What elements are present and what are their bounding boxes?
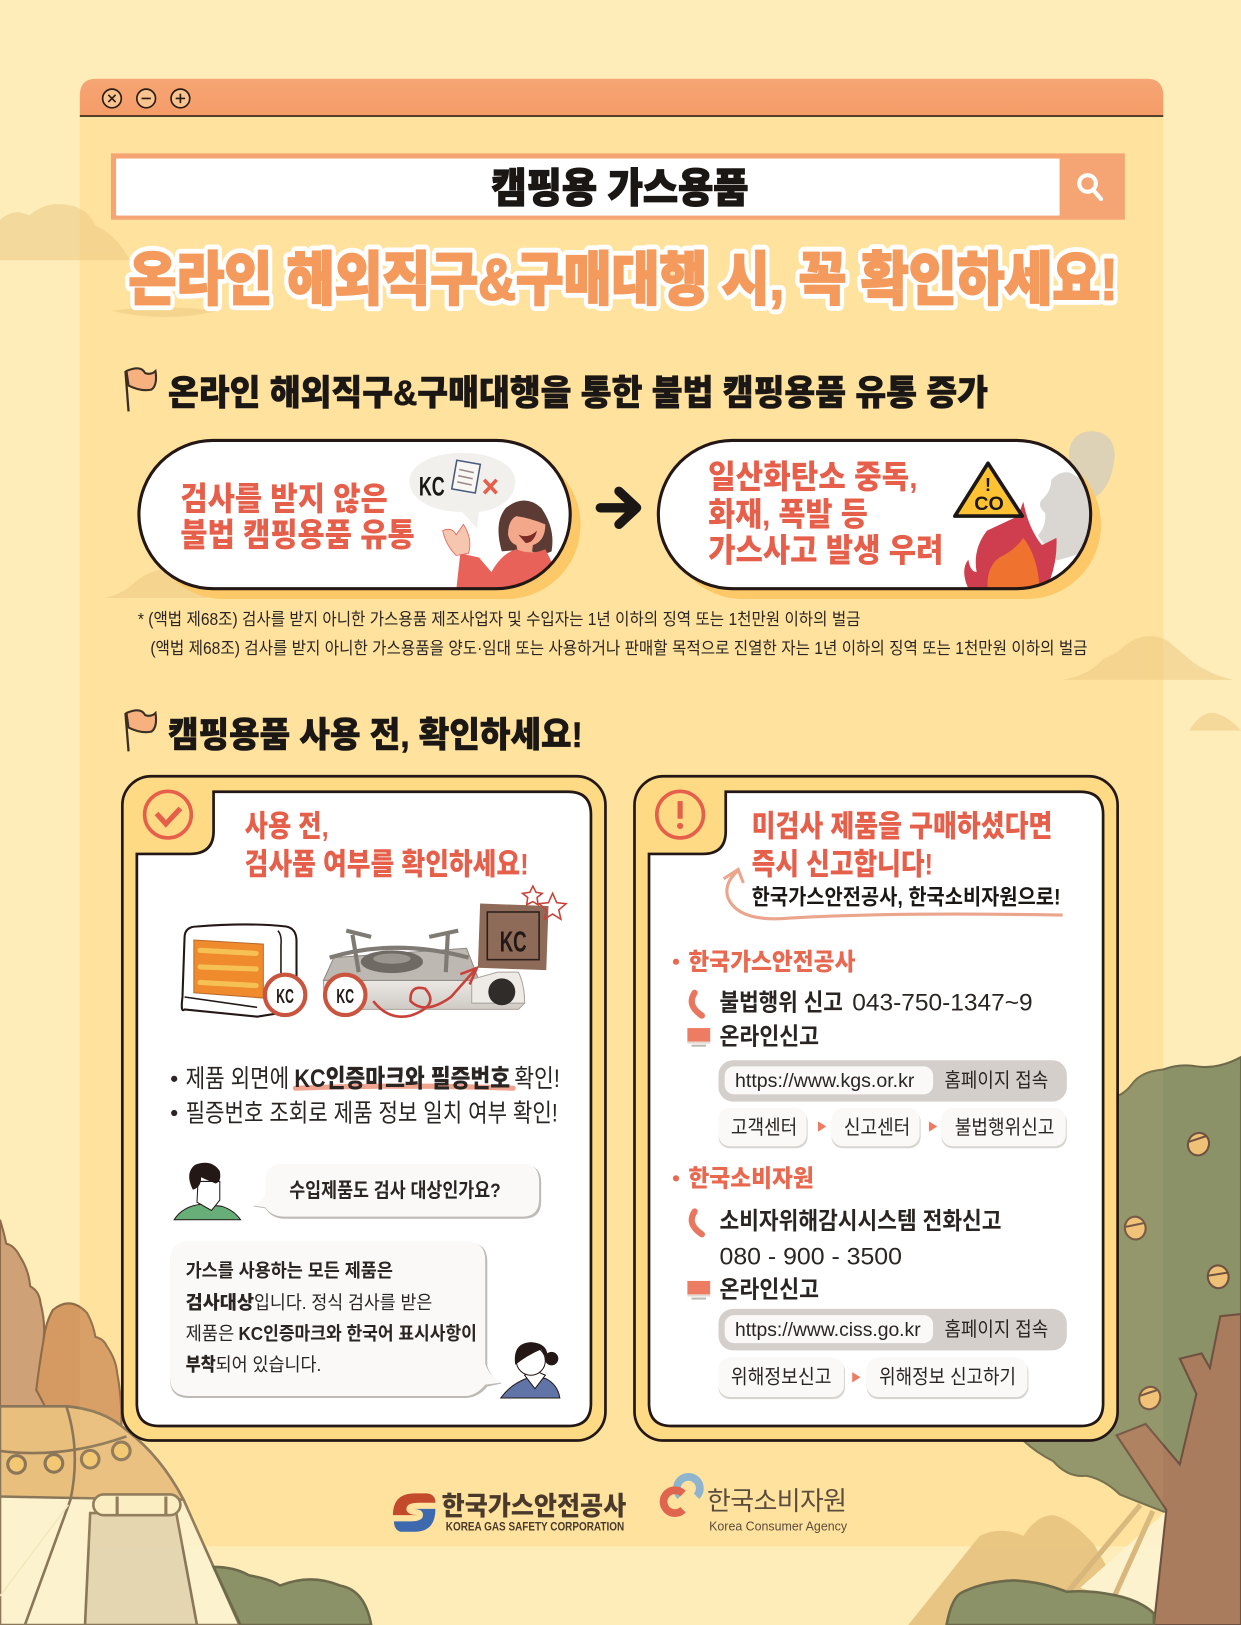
fire and smoke illustration bbox=[964, 472, 1095, 593]
panel: illegal goods pill bbox=[139, 440, 581, 599]
footnotes: (액법 제68조) 검사를 받지 아니한 가스용품을 양도·임대 또는 사용하거나 판매할 목적으로 진열한 자는 1년 이하의 징역 또는 1천만원 이하의 벌금 bbox=[150, 639, 1088, 658]
icon: phone bbox=[692, 993, 702, 1016]
icon: monitor bbox=[687, 1281, 710, 1300]
logo: Korea Gas Safety Corporation bbox=[393, 1492, 626, 1534]
icon: CO warning triangle: ! bbox=[985, 474, 991, 495]
icon: magnifier bbox=[1079, 175, 1101, 199]
icon: man bbox=[174, 1163, 241, 1220]
KGS phone number bbox=[720, 989, 1033, 1016]
acorns bbox=[1123, 1129, 1230, 1413]
footnotes bbox=[138, 610, 1088, 658]
icon: KC speech bubble bbox=[410, 453, 515, 529]
icon: CO warning triangle bbox=[955, 463, 1022, 516]
panel heading bbox=[752, 810, 1052, 882]
logo: Korea Gas Safety Corporation: KOREA GAS SAFETY CORPORATION bbox=[446, 1520, 624, 1534]
checklist: KC인증마크와 필증번호 bbox=[294, 1065, 510, 1093]
footnotes: * (액법 제68조) 검사를 받지 아니한 가스용품 제조사업자 및 수입자는 1년 이하의 징역 또는 1천만원 이하의 벌금 bbox=[138, 610, 861, 629]
speech bubble: answer: 제품은 bbox=[186, 1323, 234, 1344]
pill text: 일산화탄소 중독, bbox=[708, 459, 918, 495]
panel: report bbox=[634, 776, 1118, 1441]
speech bubble: answer: 되어 있습니다. bbox=[216, 1354, 321, 1375]
background illustration: trees, tent and bushes bbox=[0, 1057, 1241, 1625]
woman illustration bbox=[443, 501, 560, 591]
right tree trunk bbox=[1117, 1314, 1241, 1625]
KCA phone number: 080 - 900 - 3500 bbox=[720, 1243, 902, 1270]
background clouds bbox=[0, 204, 1241, 731]
speech bubble: answer bbox=[170, 1242, 502, 1398]
sub heading with arrow: 한국가스안전공사, 한국소비자원으로! bbox=[752, 885, 1061, 910]
KGS online label: 온라인신고 bbox=[720, 1024, 819, 1051]
checklist bbox=[171, 1065, 560, 1127]
KCA path buttons: 위해정보 신고하기 bbox=[879, 1367, 1016, 1389]
icon: heater bbox=[182, 924, 305, 1017]
KCA phone number bbox=[720, 1208, 1002, 1270]
section heading 2: 캠핑용품 사용 전, 확인하세요! bbox=[168, 716, 583, 755]
KGS phone number: 불법행위 신고 bbox=[720, 989, 843, 1016]
search bar title: 캠핑용 가스용품 bbox=[491, 165, 749, 211]
panel heading: 즉시 신고합니다! bbox=[752, 849, 933, 882]
right bush bbox=[947, 1580, 1154, 1625]
section: KGS bbox=[673, 949, 1067, 1148]
emblem bbox=[664, 1477, 700, 1513]
KGS path buttons bbox=[718, 1108, 1067, 1148]
icon: KC certificate label: KC bbox=[500, 926, 527, 958]
speech bubble: answer: 입니다. 정식 검사를 받은 bbox=[254, 1292, 432, 1313]
icon: gas stove: KC bbox=[336, 985, 354, 1008]
KCA online label: 온라인신고 bbox=[720, 1277, 819, 1304]
left tent bbox=[0, 1406, 239, 1625]
smoke blob behind pill bbox=[1069, 431, 1115, 500]
left back tree bbox=[0, 1220, 47, 1409]
icon: KC certificate label bbox=[478, 886, 566, 970]
KCA path buttons bbox=[718, 1358, 1028, 1399]
KCA url bar: 홈페이지 접속 bbox=[944, 1319, 1048, 1341]
KCA url bar: https://www.ciss.go.kr bbox=[735, 1319, 921, 1341]
pill text: 검사를 받지 않은 bbox=[180, 481, 388, 517]
KCA url bar bbox=[718, 1309, 1067, 1350]
right tent bbox=[1080, 1511, 1166, 1613]
speech bubble: question: 수입제품도 검사 대상인가요? bbox=[289, 1180, 501, 1202]
speech bubble: answer: KC인증마크와 한국어 표시사항이 bbox=[238, 1323, 477, 1344]
section heading 1: 온라인 해외직구&구매대행을 통한 불법 캠핑용품 유통 증가 bbox=[168, 374, 988, 413]
main headline: 온라인 해외직구&구매대행 시, 꼭 확인하세요! bbox=[129, 248, 1118, 313]
left front tree bbox=[36, 1303, 121, 1435]
pill text bbox=[708, 459, 943, 569]
sub heading with arrow bbox=[724, 869, 1063, 919]
speech bubble: answer: 검사대상 bbox=[186, 1292, 254, 1313]
main headline: 온라인 해외직구&구매대행 시, 꼭 확인하세요! bbox=[129, 248, 1118, 313]
icon: phone bbox=[692, 1211, 702, 1234]
pill text: 가스사고 발생 우려 bbox=[708, 533, 943, 569]
checklist: 필증번호 조회로 제품 정보 일치 여부 확인! bbox=[186, 1099, 558, 1127]
icon: heater: KC bbox=[276, 985, 294, 1008]
KGS url bar: 홈페이지 접속 bbox=[944, 1070, 1048, 1092]
KGS path buttons: 신고센터 bbox=[844, 1117, 910, 1139]
arrow bbox=[600, 491, 637, 524]
speech bubble: answer: 부착 bbox=[186, 1354, 216, 1375]
icon: gas stove bbox=[323, 931, 525, 1017]
browser window panel bbox=[80, 79, 1163, 1546]
icon: counselor bbox=[501, 1342, 560, 1398]
panel heading: 사용 전, bbox=[245, 810, 329, 843]
right tree foliage bbox=[1023, 1057, 1241, 1513]
speech bubble: answer: 가스를 사용하는 모든 제품은 bbox=[186, 1260, 393, 1281]
pill text: 불법 캠핑용품 유통 bbox=[180, 517, 415, 553]
search bar bbox=[111, 153, 1125, 220]
emblem bbox=[393, 1493, 435, 1532]
icon: flag 1 bbox=[125, 368, 156, 411]
panel heading: 미검사 제품을 구매하셨다면 bbox=[752, 810, 1052, 843]
logo: Korea Consumer Agency: Korea Consumer Agency bbox=[709, 1519, 848, 1534]
panel heading bbox=[245, 810, 529, 882]
KCA path buttons: 위해정보신고 bbox=[731, 1367, 831, 1389]
icon: KC speech bubble: KC bbox=[419, 471, 445, 501]
logo: Korea Consumer Agency bbox=[664, 1477, 848, 1534]
window tint over illustration bbox=[80, 116, 1163, 1546]
section: KCA bbox=[673, 1166, 1067, 1399]
icon: check circle bbox=[145, 791, 191, 838]
KCA phone number: 소비자위해감시시스템 전화신고 bbox=[720, 1208, 1002, 1235]
pill text: 화재, 폭발 등 bbox=[708, 496, 868, 532]
icon: monitor bbox=[687, 1028, 710, 1047]
section: KGS: 한국가스안전공사 bbox=[688, 949, 855, 976]
KGS path buttons: 불법행위신고 bbox=[955, 1117, 1054, 1139]
speech bubble: question bbox=[253, 1164, 541, 1219]
icon: flag 2 bbox=[125, 710, 156, 751]
pill text bbox=[180, 481, 415, 553]
section: KCA: 한국소비자원 bbox=[688, 1166, 814, 1193]
panel: before use bbox=[122, 776, 605, 1441]
checklist: 확인! bbox=[514, 1065, 560, 1093]
left bush bbox=[214, 1567, 371, 1625]
KGS url bar: https://www.kgs.or.kr bbox=[735, 1070, 915, 1092]
mountains bbox=[908, 1515, 1140, 1625]
panel heading: 검사품 여부를 확인하세요! bbox=[245, 849, 529, 882]
checklist: 제품 외면에 bbox=[186, 1065, 289, 1093]
KGS url bar bbox=[718, 1060, 1067, 1102]
icon: CO warning triangle: CO bbox=[974, 493, 1004, 515]
KGS phone number: 043-750-1347~9 bbox=[852, 989, 1033, 1016]
logo: Korea Gas Safety Corporation: 한국가스안전공사 bbox=[442, 1492, 626, 1521]
icon: exclamation circle bbox=[657, 791, 703, 838]
logo: Korea Consumer Agency: 한국소비자원 bbox=[707, 1487, 847, 1516]
KGS path buttons: 고객센터 bbox=[731, 1117, 797, 1139]
panel: gas accident pill bbox=[658, 440, 1101, 599]
